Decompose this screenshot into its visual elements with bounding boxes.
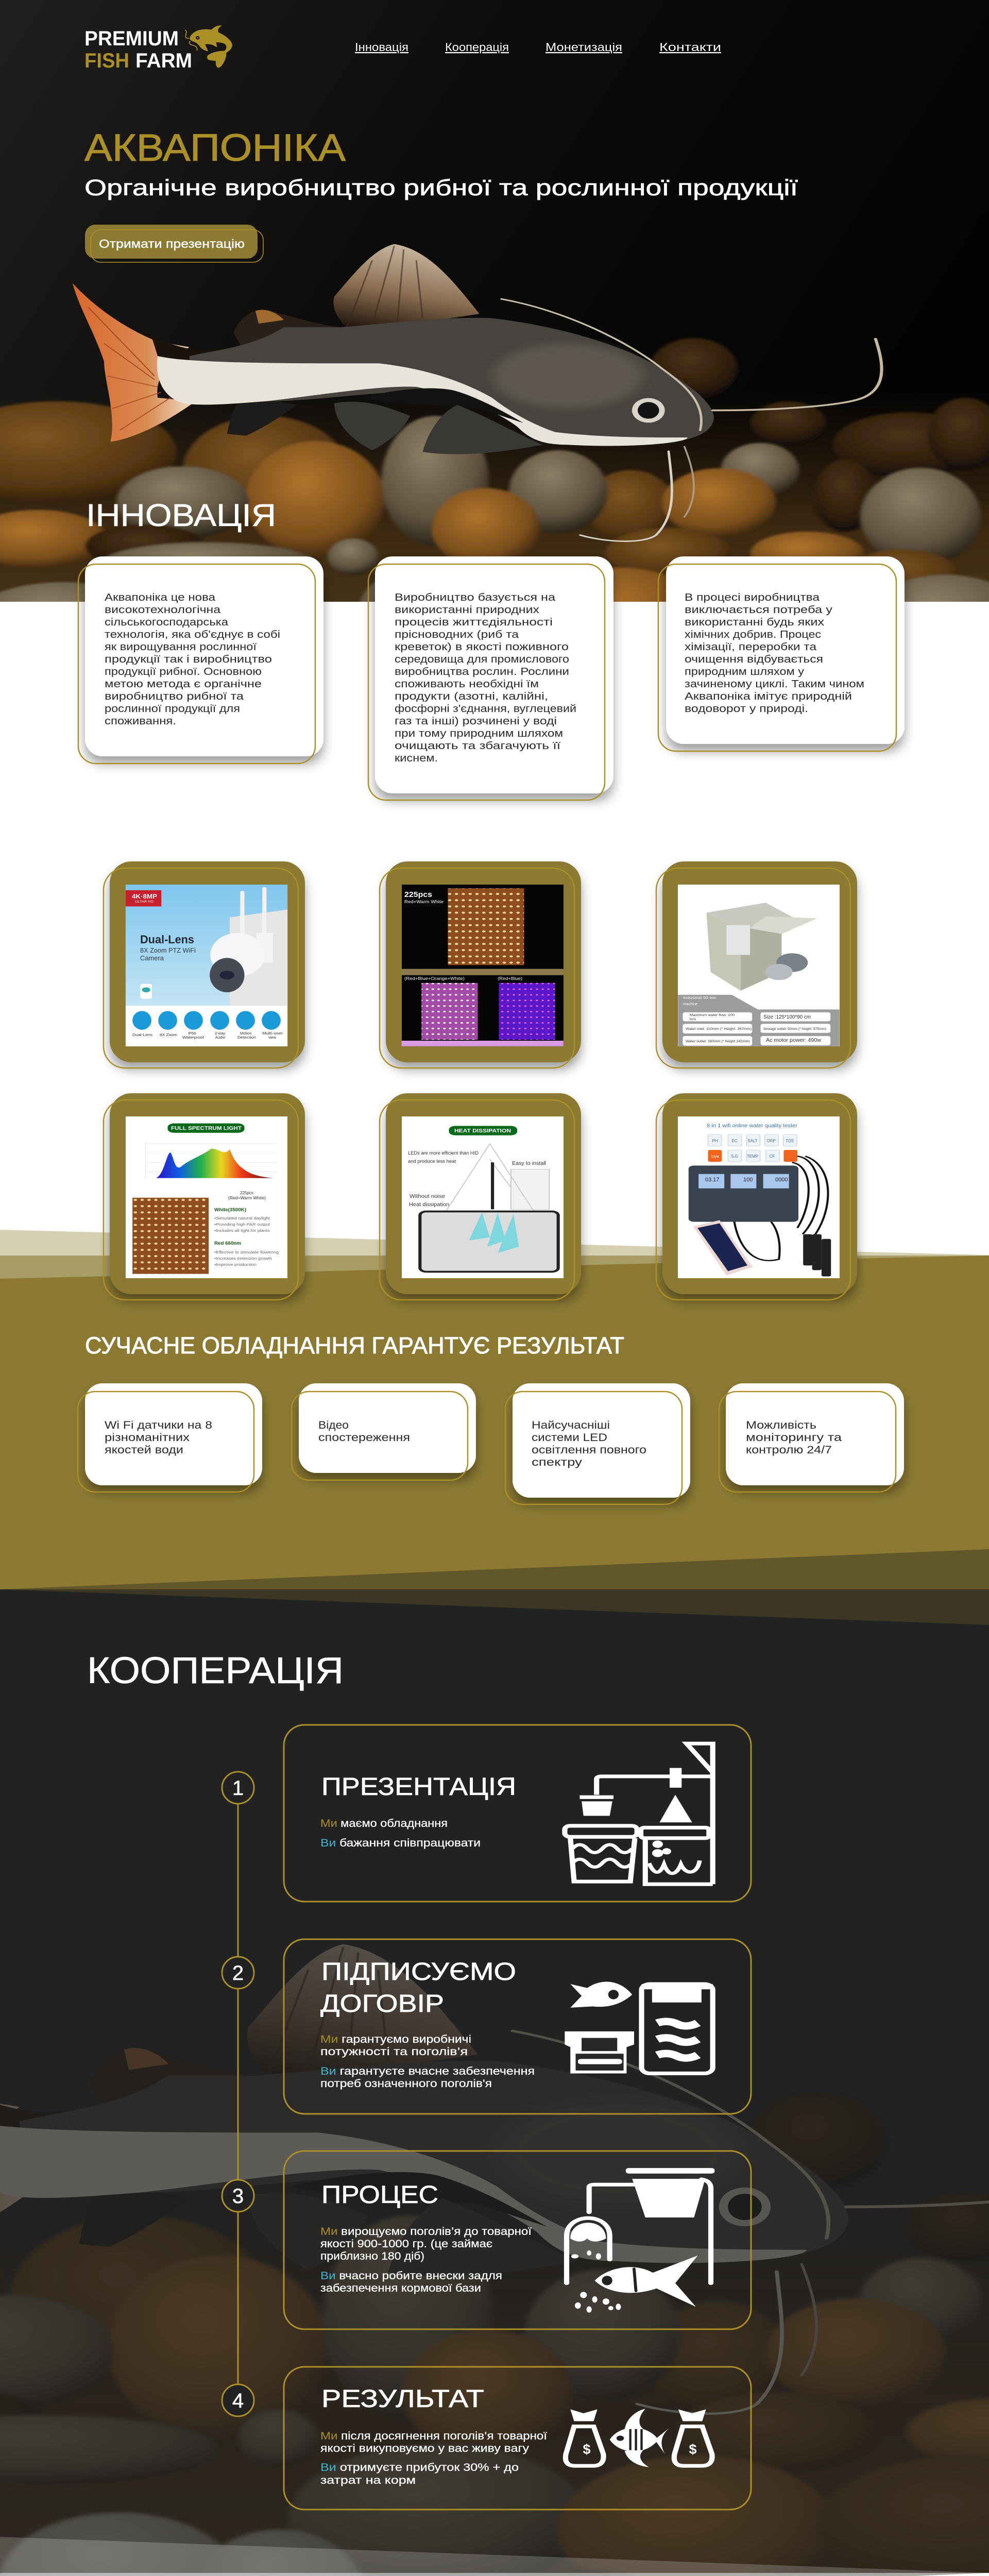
- logo: FARM: [135, 49, 192, 72]
- panel: step 3 process: ПРОЦЕС: [321, 2181, 438, 2209]
- panel: equipment tile 4, full spectrum: (Red+Warm White): [228, 1196, 266, 1200]
- step number 1: 1: [232, 1777, 244, 1800]
- panel: innovation card 1: продукції так і виробництво: [105, 654, 272, 665]
- panel: innovation card 1: [78, 556, 323, 764]
- heading: innovation: ІННОВАЦІЯ: [86, 498, 276, 533]
- panel: step 4 result: $: [583, 2442, 591, 2457]
- panel: equipment tile 1, camera: Audio: [215, 1035, 225, 1040]
- hero subtitle: Органічне виробництво рибної та рослинної продукції: [84, 175, 798, 200]
- panel: equipment tile 6, water quality tester: TDS: [786, 1139, 794, 1143]
- panel: equipment tile 3, drum filter: Sewage outlet: 50mm (* height :575mm): [763, 1027, 826, 1031]
- panel: equipment tile 5, heat dissipation: [380, 1093, 581, 1300]
- panel: equipment tile 3, drum filter: machine: [683, 1002, 697, 1006]
- hero photo: catfish over river stones: [0, 0, 989, 602]
- panel: equipment tile 1, camera: Dual-Lens: [132, 1032, 152, 1037]
- panel: equipment tile 2, LED panels: [380, 861, 581, 1068]
- panel: innovation card 1: рослинної продукції для: [105, 703, 240, 715]
- panel: innovation card 2: використанні природних: [395, 604, 539, 616]
- panel: feature card LED lighting: спектру: [532, 1456, 583, 1468]
- panel: step 4 result: Ми після досягнення поголів’я товарної: [320, 2430, 547, 2442]
- panel: innovation card 3: [658, 556, 905, 751]
- panel: innovation card 3: водоворот у природі.: [685, 703, 808, 715]
- panel: equipment tile 4, full spectrum: FULL SPECTRUM LIGHT: [171, 1126, 242, 1131]
- panel: innovation card 3: В процесі виробництва: [685, 592, 820, 603]
- panel: innovation card 1: Аквапоніка це нова: [105, 592, 216, 603]
- logo: PREMIUM: [84, 27, 179, 50]
- panel: innovation card 3: виключається потреба у: [685, 604, 832, 616]
- panel: equipment tile 6, water quality tester: [656, 1093, 857, 1300]
- panel: step 2 contract: Ми гарантуємо виробничі: [320, 2033, 471, 2045]
- panel: innovation card 1: виробництво рибної та: [105, 691, 244, 702]
- panel: equipment tile 3, drum filter: [656, 861, 857, 1068]
- panel: equipment tile 6, water quality tester: PH: [712, 1139, 718, 1143]
- panel: feature card LED lighting: системи LED: [532, 1432, 607, 1444]
- panel: equipment tile 4, full spectrum: •Providing high PAR output: [214, 1223, 270, 1227]
- panel: equipment tile 6, water quality tester: 03.17: [705, 1177, 720, 1183]
- icon: aquaponics tanks: [565, 1743, 713, 1884]
- panel: step 3 process: Ми вирощуємо поголів’я до товарної: [320, 2226, 532, 2238]
- panel: step 4 result: затрат на корм: [320, 2475, 416, 2486]
- panel: equipment tile 3, drum filter: Size :125*100*90 cm: [763, 1014, 811, 1020]
- logo: [84, 25, 232, 72]
- panel: step 4 result: $: [689, 2442, 697, 2457]
- heading: cooperation: КООПЕРАЦІЯ: [87, 1650, 344, 1691]
- panel: equipment tile 5, heat dissipation: Heat dissipation: [409, 1202, 449, 1208]
- panel: innovation card 2: очищають та збагачують її: [395, 740, 561, 752]
- panel: feature card wi-fi sensors: [78, 1383, 262, 1492]
- panel: feature card LED lighting: [505, 1383, 690, 1504]
- panel: step 2 contract: Ви гарантуєте вчасне забезпечення: [320, 2065, 535, 2077]
- panel: step 4 result: [284, 2367, 751, 2510]
- panel: equipment tile 6, water quality tester: 100: [743, 1177, 753, 1183]
- step number 3: 3: [232, 2185, 244, 2208]
- panel: equipment tile 5, heat dissipation: HEAT DISSIPATION: [454, 1128, 511, 1134]
- panel: step 2 contract: ПІДПИСУЄМО: [321, 1958, 516, 1986]
- panel: step 3 process: [284, 2151, 751, 2329]
- panel: equipment tile 3, drum filter: Maximum water flow: 100: [690, 1013, 735, 1017]
- panel: equipment tile 1, camera: ULTAR HD: [135, 901, 154, 904]
- panel: equipment tile 2, LED panels: Red+Warm White: [404, 899, 444, 904]
- panel: equipment tile 5, heat dissipation: and produce less heat: [408, 1159, 456, 1164]
- panel: equipment tile 3, drum filter: tons: [690, 1018, 696, 1021]
- panel: equipment tile 4, full spectrum: •Increases extension growth: [214, 1257, 272, 1261]
- panel: feature card monitoring: контролю 24/7: [746, 1444, 832, 1456]
- panel: equipment tile 1, camera: 8X Zoom PTZ WiFi: [140, 946, 196, 954]
- panel: equipment tile 4, full spectrum: Red 660nm: [214, 1241, 241, 1246]
- step number 1: [222, 1772, 254, 1804]
- panel: equipment tile 1, camera: Motion: [240, 1031, 252, 1036]
- panel: innovation card 2: середовища для промислового: [395, 654, 569, 665]
- panel: feature card LED lighting: Найсучасніші: [532, 1419, 610, 1431]
- panel: equipment tile 5, heat dissipation: Easy to install: [512, 1161, 546, 1166]
- panel: innovation card 1: високотехнологічна: [105, 604, 221, 616]
- panel: step 2 contract: [284, 1939, 751, 2114]
- panel: step 2 contract: потужності та поголів’я: [320, 2046, 468, 2058]
- panel: equipment tile 6, water quality tester: tuya: [711, 1154, 719, 1159]
- panel: equipment tile 6, water quality tester: 8 in 1 wifi online water quality tester: [707, 1123, 798, 1129]
- panel: innovation card 1: метою метода є органічне: [105, 679, 262, 690]
- panel: feature card wi-fi sensors: якостей води: [105, 1444, 183, 1456]
- panel: equipment tile 1, camera: Waterproof: [182, 1035, 204, 1040]
- hero title: АКВАПОНІКА: [84, 126, 346, 169]
- panel: equipment tile 1, camera: Multi-user: [262, 1031, 283, 1036]
- panel: innovation card 1: продукції рибної. Основною: [105, 666, 262, 677]
- navigation: Контакти: [659, 41, 721, 54]
- panel: innovation card 2: при тому природним шляхом: [395, 728, 563, 739]
- panel: step 4 result: РЕЗУЛЬТАТ: [321, 2385, 484, 2413]
- panel: equipment tile 1, camera: Detection: [237, 1035, 256, 1040]
- panel: innovation card 3: Аквапоніка імітує природній: [685, 691, 852, 702]
- panel: step 2 contract: потреб означенного поголів'я: [320, 2078, 492, 2090]
- step number 4: [222, 2384, 254, 2416]
- panel: feature card wi-fi sensors: різноманітних: [105, 1432, 190, 1444]
- panel: equipment tile 3, drum filter: Water outlet: 160mm (* height 242mm): [686, 1040, 750, 1043]
- panel: equipment tile 6, water quality tester: ORP: [766, 1139, 776, 1143]
- navigation: Кооперація: [445, 41, 509, 54]
- icon: money bags and fish: [566, 2409, 712, 2467]
- panel: equipment tile 1, camera: [104, 861, 305, 1068]
- cooperation section background with faded fish photo: [0, 1589, 989, 2576]
- panel: feature card video: спостереження: [318, 1432, 410, 1444]
- panel: innovation card 1: технологія, яка об'єднує в собі: [105, 629, 280, 640]
- panel: equipment tile 1, camera: Dual-Lens: [140, 933, 194, 946]
- panel: step 3 process: якості 900-1000 гр. (це займає: [320, 2238, 492, 2250]
- panel: innovation card 2: Виробництво базується на: [395, 592, 556, 603]
- panel: innovation card 2: газ та інші) розчинені у воді: [395, 716, 557, 727]
- hero section: [0, 0, 989, 602]
- panel: feature card monitoring: Можливість: [746, 1419, 816, 1431]
- panel: innovation card 3: зачиненому циклі. Таким чином: [685, 679, 864, 690]
- panel: step 2 contract: ДОГОВІР: [320, 1990, 444, 2018]
- hero button: [85, 225, 263, 262]
- panel: equipment tile 4, full spectrum: •Improve production: [214, 1263, 257, 1267]
- panel: step 3 process: Ви вчасно робите внески задля: [320, 2270, 502, 2282]
- panel: equipment tile 6, water quality tester: SALT: [747, 1139, 758, 1143]
- panel: equipment tile 3, drum filter: Water inlet: 110mm (* Height: 267mm): [686, 1027, 752, 1031]
- panel: equipment tile 3, drum filter: Industrial 50 ton: [683, 995, 716, 1000]
- panel: step 1 presentation: ПРЕЗЕНТАЦІЯ: [321, 1773, 516, 1801]
- panel: innovation card 3: хімізації, переробки та: [685, 641, 817, 653]
- icon: fish, feed box and clipboard: [565, 1982, 713, 2073]
- step number 4: 4: [232, 2389, 244, 2412]
- panel: equipment tile 5, heat dissipation: Without noise: [410, 1194, 445, 1199]
- panel: innovation card 2: фосфорні з'єднання, вуглецевий: [395, 703, 576, 715]
- panel: innovation card 2: виробництва рослин. Рослини: [395, 666, 569, 677]
- hero button: Отримати презентацію: [99, 237, 245, 250]
- navigation: [355, 41, 721, 54]
- panel: innovation card 3: природним шляхом у: [685, 666, 804, 677]
- panel: equipment tile 4, full spectrum: 225pcs: [240, 1191, 253, 1195]
- navigation: Монетизація: [545, 41, 622, 54]
- panel: step 4 result: Ви отримуєте прибуток 30% + до: [320, 2462, 519, 2473]
- panel: innovation card 1: сільськогосподарська: [105, 617, 229, 628]
- panel: equipment tile 1, camera: IP66: [188, 1031, 196, 1036]
- panel: step 3 process: забезпечення кормової бази: [320, 2282, 481, 2294]
- panel: step 1 presentation: Ми маємо обладнання: [320, 1818, 448, 1829]
- panel: equipment tile 5, heat dissipation: LEDs are more efficient than HID: [408, 1150, 479, 1156]
- panel: equipment tile 6, water quality tester: CF: [770, 1154, 775, 1159]
- heading: modern equipment: СУЧАСНЕ ОБЛАДНАННЯ ГАРАНТУЄ РЕЗУЛЬТАТ: [85, 1332, 624, 1359]
- panel: innovation card 2: прісноводних (риб та: [395, 629, 519, 640]
- panel: innovation card 2: креветок) в якості поживного: [395, 641, 569, 653]
- panel: innovation card 3: хімічних добрив. Процес: [685, 629, 821, 640]
- panel: innovation card 3: очищення відбувається: [685, 654, 823, 665]
- panel: innovation card 2: споживають необхідні їм: [395, 679, 539, 690]
- panel: equipment tile 2, LED panels: (Red+Blue): [498, 976, 522, 981]
- panel: equipment tile 1, camera: 2-way: [215, 1031, 225, 1036]
- panel: equipment tile 4, full spectrum: •Effective to stimulate flowering: [214, 1251, 279, 1255]
- panel: feature card monitoring: моніторингу та: [746, 1432, 842, 1444]
- panel: feature card video: [292, 1383, 476, 1480]
- navigation: Інновація: [355, 41, 408, 54]
- panel: feature card video: Відео: [318, 1419, 349, 1431]
- panel: innovation card 3: використанні будь яких: [685, 617, 824, 628]
- panel: innovation card 1: як вирощування рослинної: [105, 641, 257, 653]
- logo: FISH: [84, 49, 129, 72]
- panel: innovation card 2: процесів життєдіяльності: [395, 617, 553, 628]
- panel: equipment tile 6, water quality tester: 0000: [775, 1177, 788, 1183]
- panel: feature card LED lighting: освітлення повного: [532, 1444, 646, 1456]
- step number 2: [222, 1957, 254, 1989]
- panel: innovation card 1: споживання.: [105, 716, 176, 727]
- panel: equipment tile 4, full spectrum: •Includes all light for plants: [214, 1229, 270, 1233]
- panel: equipment tile 4, full spectrum: White(3500K): [214, 1207, 246, 1212]
- panel: equipment tile 4, full spectrum: [104, 1093, 305, 1300]
- panel: innovation card 2: киснем.: [395, 753, 438, 764]
- panel: equipment tile 6, water quality tester: EC: [731, 1139, 738, 1143]
- panel: equipment tile 6, water quality tester: S.G: [731, 1154, 738, 1159]
- icon: feeder and fish: [567, 2168, 714, 2313]
- panel: innovation card 2: [368, 556, 613, 800]
- panel: step 3 process: приблизно 180 діб): [320, 2250, 424, 2262]
- panel: equipment tile 2, LED panels: 225pcs: [404, 890, 432, 899]
- step number 3: [222, 2180, 254, 2212]
- timeline: [222, 1772, 254, 2416]
- panel: equipment tile 3, drum filter: Ac motor power: 490w: [766, 1038, 822, 1043]
- panel: feature card monitoring: [719, 1383, 904, 1492]
- panel: step 1 presentation: [284, 1725, 751, 1902]
- panel: equipment tile 4, full spectrum: •Simulated natural daylight: [214, 1217, 270, 1221]
- panel: step 4 result: якості викуповуємо у вас живу вагу: [320, 2443, 530, 2454]
- panel: equipment tile 1, camera: Camera: [140, 954, 164, 962]
- panel: equipment tile 2, LED panels: (Red+Blue+Orange+White): [404, 976, 465, 981]
- panel: equipment tile 1, camera: 4K·8MP: [132, 893, 157, 900]
- panel: innovation card 2: продукти (азотні, калійні,: [395, 691, 548, 702]
- panel: step 1 presentation: Ви бажання співпрацювати: [320, 1837, 481, 1849]
- gold equipment section background: [0, 1230, 989, 1589]
- panel: feature card wi-fi sensors: Wi Fi датчики на 8: [105, 1419, 212, 1431]
- panel: equipment tile 6, water quality tester: TEMP: [747, 1154, 758, 1159]
- panel: equipment tile 1, camera: 8X Zoom: [160, 1032, 177, 1037]
- step number 2: 2: [232, 1962, 244, 1985]
- panel: equipment tile 1, camera: view: [268, 1035, 277, 1040]
